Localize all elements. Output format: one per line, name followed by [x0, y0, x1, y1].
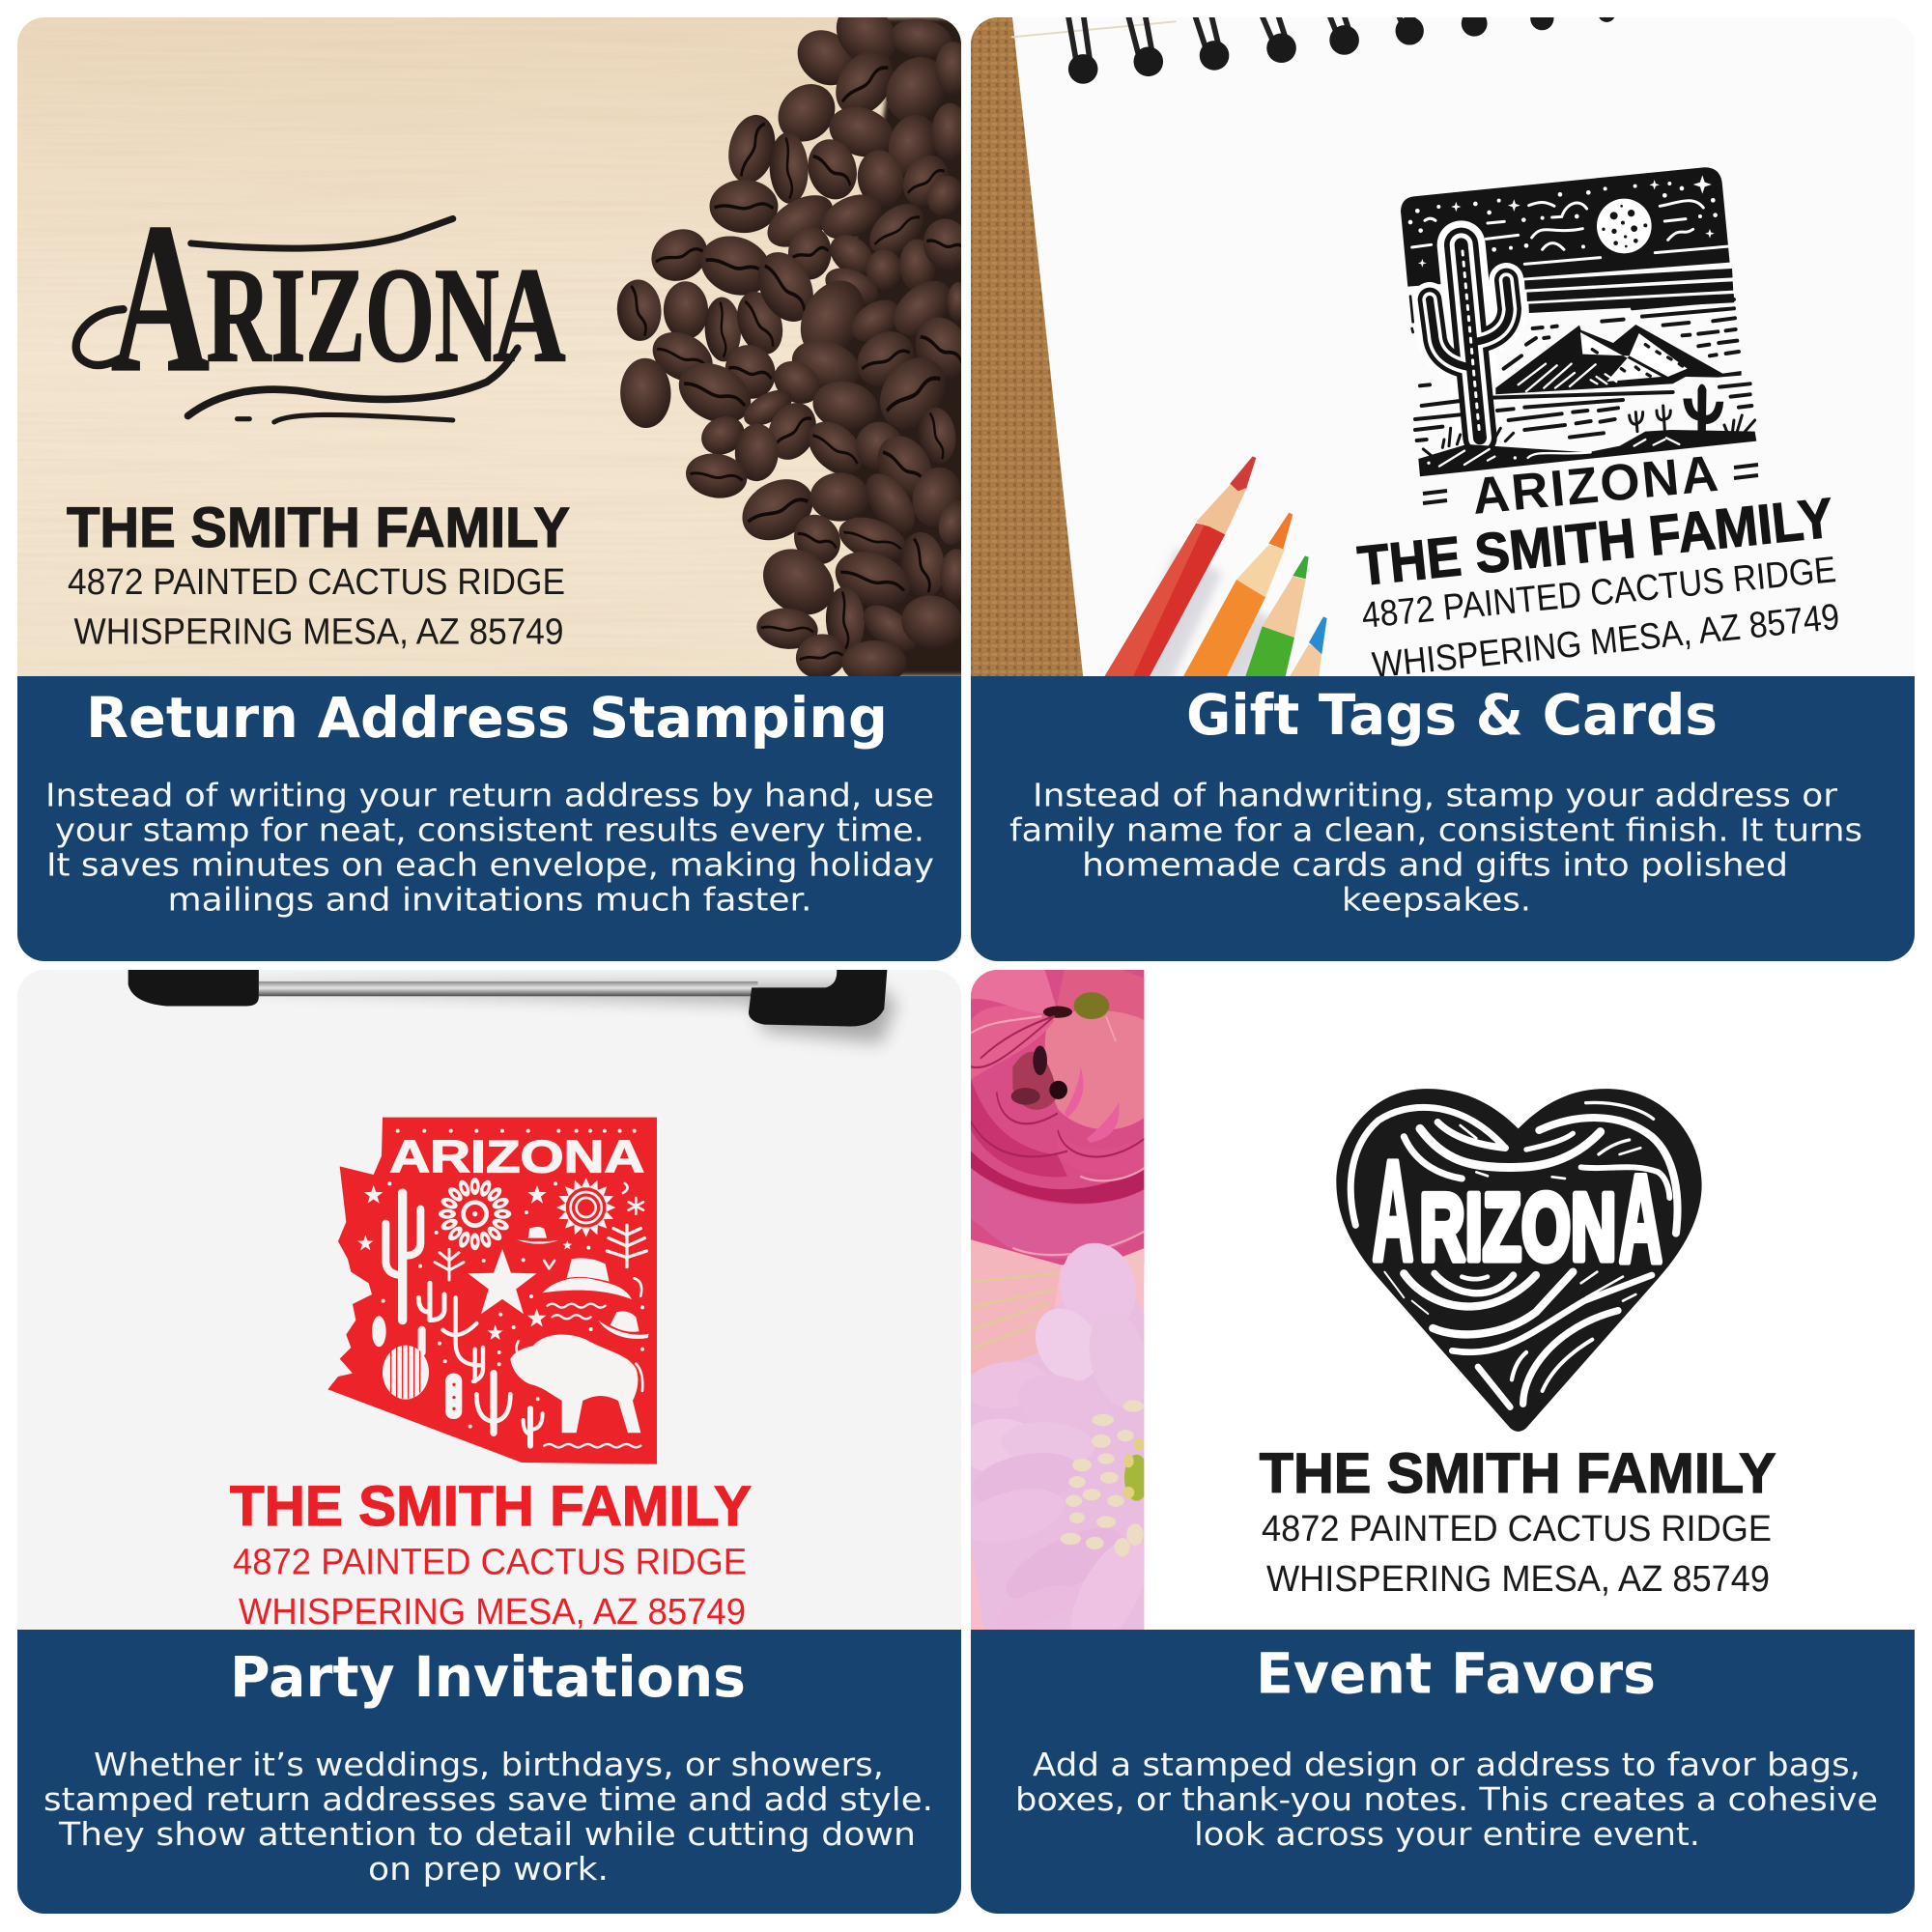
icon: foreground ground, cacti and grass	[1418, 384, 1756, 476]
caption panel: return address stamping	[17, 676, 961, 961]
stamp: family name and address	[67, 497, 570, 653]
caption panel: event favors: boxes, or thank-you notes. This creates a cohesive	[1015, 1780, 1878, 1818]
stamp: rotated Arizona, family name and address	[1355, 445, 1841, 686]
stamp: family name and address: THE SMITH FAMILY	[67, 497, 570, 559]
stamp: Arizona script logo: RIZON	[207, 241, 499, 390]
panel: party invitations	[17, 969, 961, 1914]
icon: heart swirls	[1350, 1102, 1678, 1407]
icon: suns	[439, 1178, 615, 1250]
stamp: desert scene with cactus and moon	[1401, 167, 1756, 476]
caption panel: party invitations	[17, 1630, 961, 1914]
photo: notebook on burlap with coloured pencils	[971, 17, 1615, 676]
panel: return address stamping	[17, 0, 978, 961]
stamp: Arizona script logo: A	[111, 180, 210, 417]
stamp: red family name and address: 4872 PAINTED CACTUS RIDGE	[233, 1542, 747, 1582]
icon: wave lines and small marks	[544, 1304, 640, 1447]
stamp: Arizona heart: A	[1373, 1132, 1413, 1291]
caption panel: party invitations: stamped return addresses save time and add style.	[43, 1780, 933, 1818]
caption panel: return address stamping: Instead of writing your return address by hand, use	[45, 777, 934, 813]
caption panel: party invitations: They show attention to detail while cutting down	[58, 1815, 916, 1853]
caption panel: gift tags and cards: Instead of handwriting, stamp your address or	[1033, 777, 1837, 813]
panel: gift tags and cards	[971, 5, 1915, 961]
caption panel: event favors: look across your entire event.	[1194, 1815, 1700, 1853]
icon: white cacti and trees	[385, 1193, 646, 1446]
stamp: family name and address: WHISPERING MESA, AZ 85749	[73, 612, 564, 653]
stamp: red family name and address	[230, 1475, 752, 1633]
stamp: rotated Arizona, family name and address: THE SMITH FAMILY	[1355, 486, 1836, 598]
photo: pink flowers strip	[971, 970, 1144, 1630]
caption panel: return address stamping: mailings and invitations much faster.	[168, 881, 811, 918]
caption panel: return address stamping: Return Address Stamping	[86, 685, 888, 751]
icon: stars and sky lines	[1408, 175, 1718, 268]
stamp: Arizona heart: A	[1619, 1151, 1662, 1289]
caption panel: gift tags and cards: family name for a clean, consistent finish. It turns	[1009, 811, 1862, 848]
stamp: family name and address: THE SMITH FAMILY	[1260, 1442, 1776, 1505]
panel: event favors	[958, 970, 1915, 1914]
caption panel: party invitations: Party Invitations	[230, 1644, 746, 1710]
ground lines and dashes	[1410, 297, 1751, 440]
icon: saguaro cactus	[1430, 244, 1510, 438]
stamp: Arizona script logo	[71, 214, 566, 425]
stamp: red family name and address: WHISPERING MESA, AZ 85749	[239, 1592, 746, 1633]
stamp: Arizona script logo: A	[493, 241, 566, 390]
stamp: Arizona heart	[1336, 1089, 1702, 1432]
stamp: Arizona heart: RIZON	[1419, 1174, 1616, 1280]
caption panel: return address stamping: your stamp for neat, consistent results every time.	[55, 811, 924, 848]
stamp: red Arizona state map: ARIZONA	[389, 1131, 644, 1182]
caption panel: party invitations: Whether it’s weddings, birthdays, or showers,	[94, 1746, 884, 1783]
stamp: red family name and address: THE SMITH FAMILY	[230, 1475, 752, 1538]
caption panel: gift tags and cards: homemade cards and gifts into polished	[1082, 846, 1788, 883]
icon: hats	[517, 1227, 649, 1339]
stamp: rotated Arizona, family name and address: 4872 PAINTED CACTUS RIDGE	[1360, 550, 1838, 637]
photo: clipboard sheet with metal clip	[17, 969, 961, 1636]
caption panel: event favors: Add a stamped design or address to favor bags,	[1033, 1746, 1861, 1783]
icon: flower stamens	[1061, 1400, 1144, 1556]
caption panel: event favors: Event Favors	[1256, 1640, 1656, 1706]
icon: bison	[510, 1335, 640, 1433]
icon: mountains	[1495, 325, 1742, 394]
caption panel: gift tags and cards	[971, 676, 1915, 961]
caption panel: party invitations: on prep work.	[368, 1850, 609, 1888]
caption panel: gift tags and cards: Gift Tags & Cards	[1186, 682, 1718, 748]
stamp: rotated Arizona, family name and address: ARIZONA	[1469, 445, 1720, 526]
stamp: family name and address	[1260, 1442, 1776, 1600]
stamp: red Arizona state map	[327, 1118, 657, 1464]
photo: wood table with coffee beans	[17, 0, 978, 685]
caption panel: event favors	[971, 1630, 1915, 1914]
stamp: family name and address: 4872 PAINTED CACTUS RIDGE	[1262, 1509, 1772, 1549]
stamp: family name and address: WHISPERING MESA, AZ 85749	[1266, 1559, 1770, 1600]
stamp: rotated Arizona, family name and address: WHISPERING MESA, AZ 85749	[1371, 597, 1841, 686]
stamp: family name and address: 4872 PAINTED CACTUS RIDGE	[68, 562, 565, 603]
icon: coloured pencils	[1103, 456, 1327, 683]
caption panel: return address stamping: It saves minutes on each envelope, making holiday	[46, 846, 934, 883]
caption panel: gift tags and cards: keepsakes.	[1342, 881, 1531, 918]
